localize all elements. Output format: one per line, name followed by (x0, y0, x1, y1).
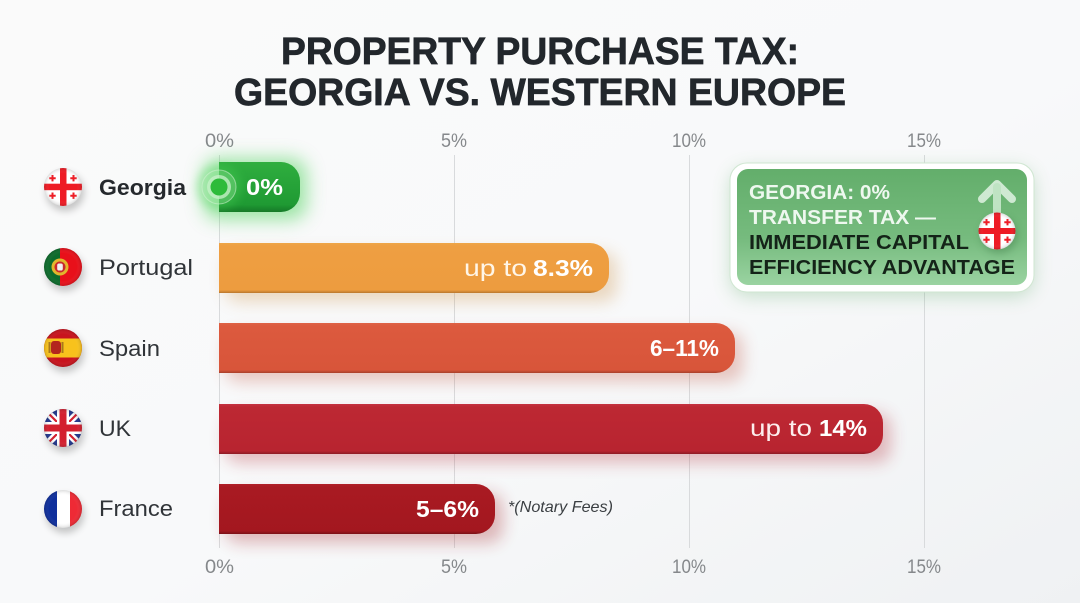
bar: Georgia 0%: 0% (246, 174, 283, 200)
bar: Portugal up to 8.3% (219, 243, 617, 302)
bar: UK up to 14%: 14% (819, 415, 867, 441)
bar: Portugal up to 8.3%: 8.3% (533, 255, 593, 281)
label: Portugal: Portugal (99, 255, 193, 280)
icon: UK flag (44, 409, 84, 452)
bar: Spain 6–11%: 6–11% (650, 335, 719, 361)
row: Georgia (44, 158, 307, 220)
callout: Georgia advantage (730, 163, 1034, 297)
title (234, 31, 846, 114)
bottom axis labels: 0% (205, 557, 234, 578)
label: Spain: Spain (99, 336, 160, 361)
row: Portugal (44, 243, 617, 302)
callout text (749, 181, 1015, 279)
note: notary fees: *(Notary Fees) (508, 499, 613, 516)
row: Spain (44, 323, 743, 382)
bottom axis labels: 10% (672, 557, 706, 578)
icon: up arrow (982, 184, 1012, 214)
bar: France 5–6%: 5–6% (416, 496, 479, 522)
top axis labels: 0% (205, 131, 234, 152)
row: UK (44, 404, 891, 463)
top axis labels (205, 131, 941, 152)
bar: Georgia 0% (196, 158, 307, 220)
label: France: France (99, 496, 173, 521)
icon: Georgia flag badge (978, 212, 1018, 254)
title: PROPERTY PURCHASE TAX: (281, 31, 799, 73)
title: GEORGIA VS. WESTERN EUROPE (234, 72, 846, 114)
chart gridlines (220, 155, 924, 548)
bottom axis labels: 5% (441, 557, 467, 578)
bar: Portugal up to 8.3%: up to (464, 255, 527, 281)
icon: Portugal flag (44, 248, 84, 291)
bar: UK up to 14% (219, 404, 891, 463)
callout text: IMMEDIATE CAPITAL (749, 231, 969, 254)
bar: UK up to 14%: up to (750, 415, 812, 441)
top axis labels: 15% (907, 131, 941, 152)
callout text: EFFICIENCY ADVANTAGE (749, 256, 1015, 279)
callout text: GEORGIA: 0% (749, 181, 890, 204)
bottom axis labels (205, 557, 941, 578)
bar: France 5–6% (219, 484, 503, 543)
label: Georgia: Georgia (99, 175, 187, 200)
top axis labels: 5% (441, 131, 467, 152)
icon: Spain flag (44, 329, 84, 372)
row: France (44, 484, 613, 543)
bottom axis labels: 15% (907, 557, 941, 578)
icon: France flag (44, 490, 84, 533)
top axis labels: 10% (672, 131, 706, 152)
callout text: TRANSFER TAX — (749, 206, 937, 229)
bar: Spain 6–11% (219, 323, 743, 382)
icon: Georgia flag (44, 168, 84, 211)
label: UK: UK (99, 416, 131, 441)
